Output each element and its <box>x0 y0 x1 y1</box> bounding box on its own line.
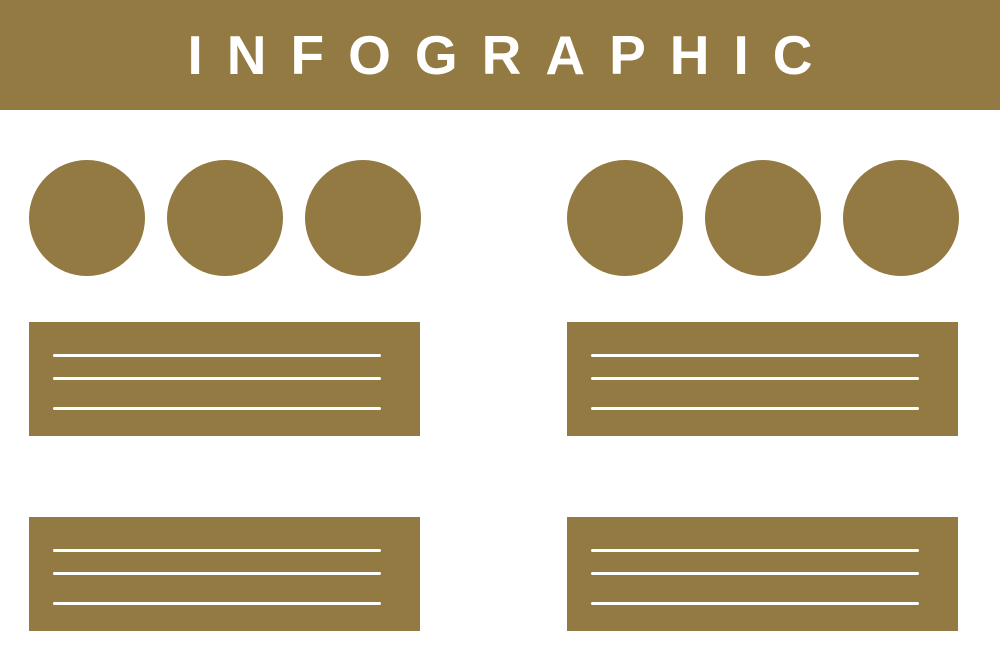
circle 1 <box>29 160 145 276</box>
panel: top left text box <box>29 322 420 436</box>
panel: top right text box <box>567 322 958 436</box>
panel: bottom right text box <box>567 517 958 631</box>
circle 4 <box>567 160 683 276</box>
title: INFOGRAPHIC <box>188 24 836 86</box>
circle 6 <box>843 160 959 276</box>
header bar <box>0 0 1000 110</box>
circle 5 <box>705 160 821 276</box>
circle 2 <box>167 160 283 276</box>
panel: bottom left text box <box>29 517 420 631</box>
circle 3 <box>305 160 421 276</box>
